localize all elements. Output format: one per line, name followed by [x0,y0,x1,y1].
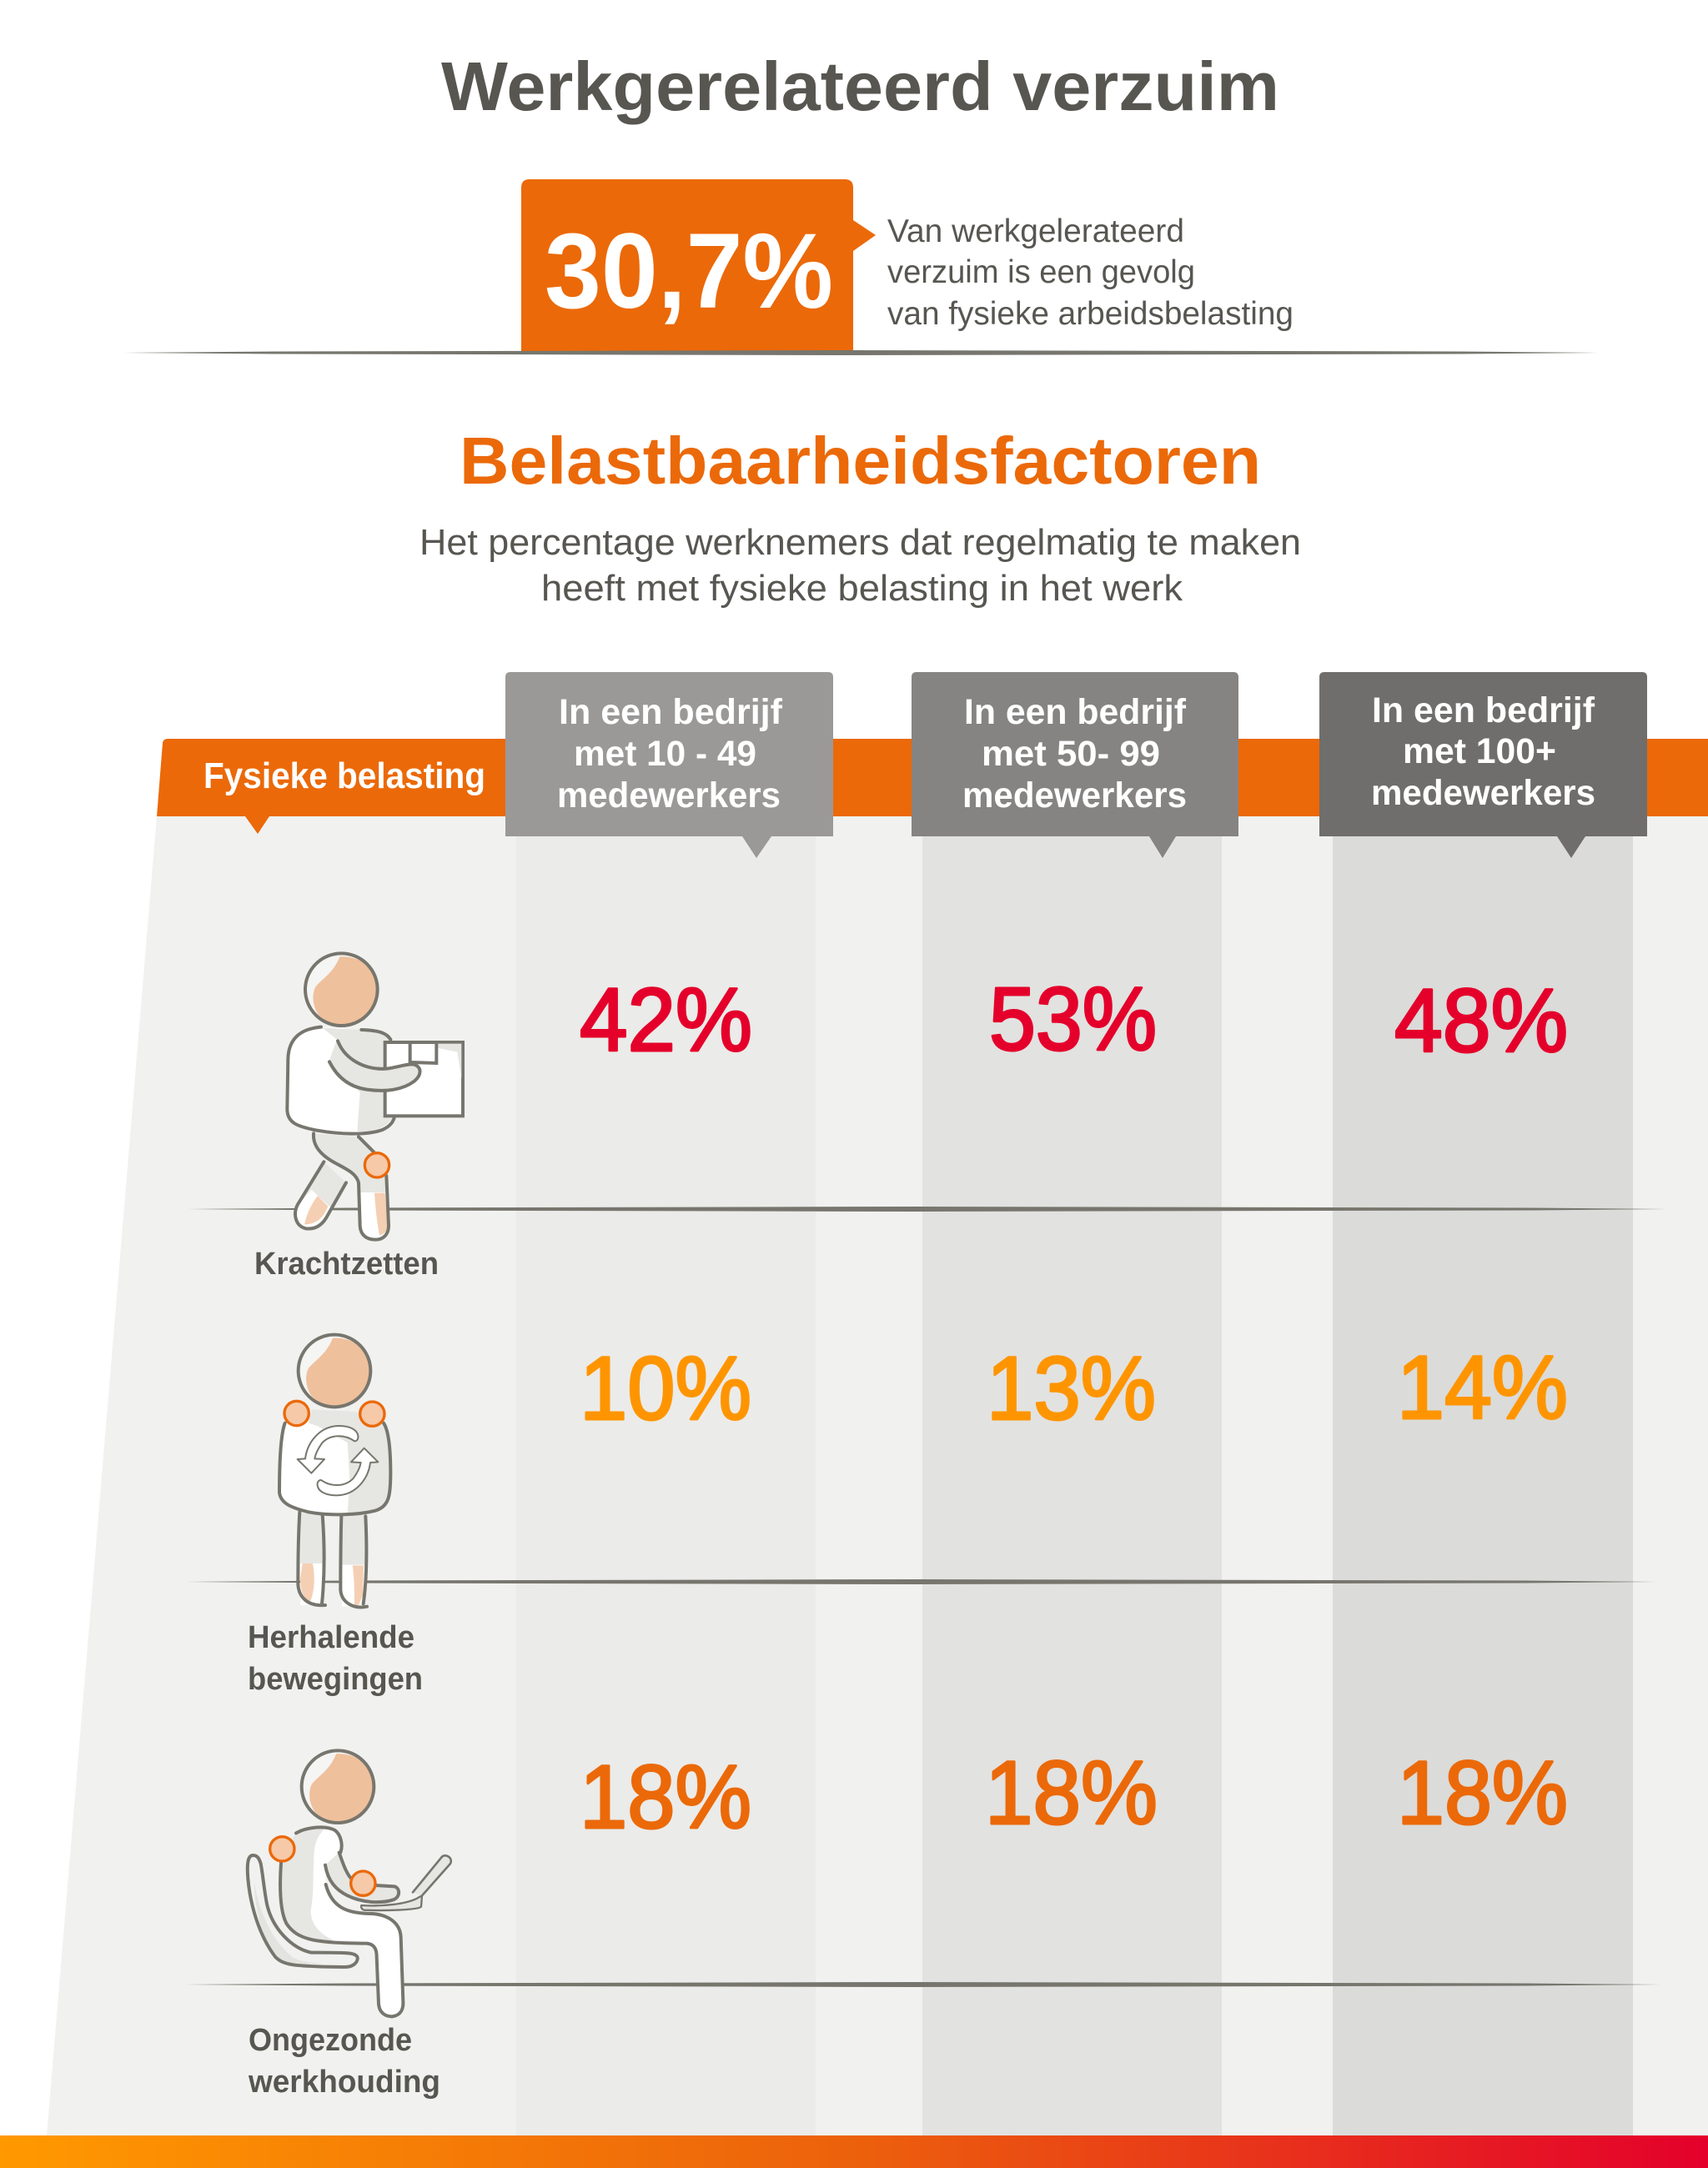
header bar: Fysieke belasting [157,739,1708,834]
row 3 values: 18% [1397,1742,1568,1843]
column header: 50-99: In een bedrijf [964,692,1187,732]
subheading: heeft met fysieke belasting in het werk [541,568,1183,609]
icon: seated person at a laptop [248,1750,451,2016]
row 1 values: 53% [989,968,1157,1069]
title: Werkgerelateerd verzuim [441,48,1279,125]
column header: 10-49: met 10 - 49 [574,734,756,774]
callout: 30,7% statistic [521,179,876,353]
column header: 50-99 [912,672,1238,858]
row 2 values: 10% [580,1337,751,1438]
row 1 values: 42% [580,969,752,1070]
icon: person with repetitive movement arrows [279,1335,390,1607]
row 1 values: 48% [1394,970,1568,1071]
row 1 values [580,968,1568,1071]
panel: table background [47,816,1708,2135]
label: Herhalende bewegingen: Herhalende [248,1620,414,1655]
column header: 50-99: medewerkers [962,775,1187,816]
callout text: Van werkgelerateerd [887,213,1184,249]
row 3 values: 18% [580,1746,751,1847]
callout: 30,7% statistic: 30,7% [545,212,833,331]
row 2 values [580,1337,1568,1438]
subheading: Het percentage werknemers dat regelmatig te maken [419,522,1301,563]
row 3 values [580,1742,1568,1847]
callout text: verzuim is een gevolg [887,254,1195,290]
heading: Belastbaarheidsfactoren: Belastbaarheidsfactoren [460,424,1261,498]
column header: 50-99: met 50- 99 [982,734,1160,774]
label: Ongezonde werkhouding [248,2023,440,2100]
column header: 10-49: In een bedrijf [559,692,783,732]
footer gradient bar [0,2135,1708,2168]
column header: 100+: medewerkers [1371,773,1595,813]
label: Ongezonde werkhouding: werkhouding [248,2065,440,2100]
row 3 values: 18% [985,1742,1158,1843]
label: Ongezonde werkhouding: Ongezonde [249,2023,412,2058]
label: Krachtzetten: Krachtzetten [254,1247,439,1282]
icon: person lifting a box [287,953,463,1240]
column header: 10-49 [505,672,833,858]
row 2 values: 13% [987,1337,1156,1438]
callout text: van fysieke arbeidsbelasting [887,296,1294,332]
column header: 100+ [1319,672,1647,858]
column header: 10-49: medewerkers [557,775,781,816]
label: Herhalende bewegingen [248,1620,423,1697]
row 2 values: 14% [1397,1337,1568,1438]
subheading [419,522,1301,609]
label: Herhalende bewegingen: bewegingen [248,1662,423,1697]
column header: 100+: met 100+ [1403,731,1556,771]
callout text [887,213,1294,332]
column header: 100+: In een bedrijf [1372,690,1595,730]
header bar: Fysieke belasting: Fysieke belasting [203,755,485,796]
